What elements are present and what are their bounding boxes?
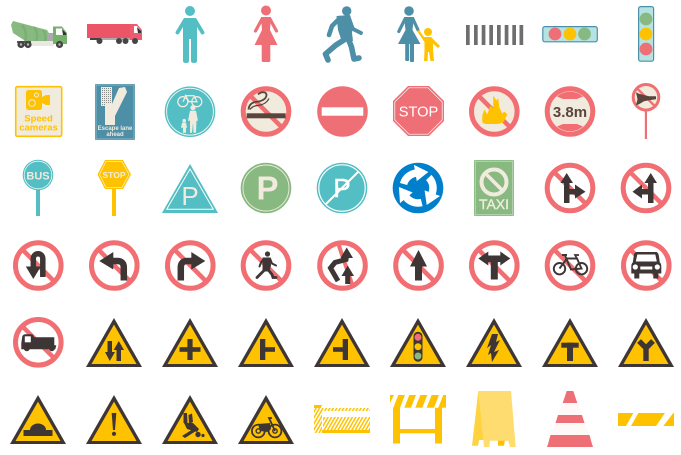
sign: T-junction warning	[542, 318, 598, 367]
icon: horizontal traffic light	[543, 27, 597, 42]
sign: no parking	[317, 163, 367, 213]
icon: woman	[254, 6, 278, 62]
sign: no parking: P	[333, 173, 351, 203]
sign: no left or right turn	[472, 243, 517, 288]
sign: no entry	[317, 86, 368, 137]
sign: shared cycle and pedestrian route	[165, 86, 215, 137]
icon: adult with child	[398, 6, 440, 62]
icon: man	[178, 6, 202, 63]
sign: no horn on pole	[633, 84, 659, 139]
sign: side road left warning	[314, 318, 370, 367]
icon: vertical traffic light	[639, 7, 654, 61]
icon: cement mixer truck	[11, 21, 67, 48]
sign: height limit 3.8m: 3.8m	[553, 104, 587, 121]
sign: bus stop on pole	[23, 160, 53, 216]
sign: no straight ahead	[396, 243, 441, 288]
sign: speed bump warning	[10, 395, 66, 444]
sign: green parking	[241, 163, 291, 213]
barrier: striped road barrier	[390, 395, 446, 444]
sign: height limit 3.8m	[547, 89, 593, 134]
sign: no taxi	[474, 160, 514, 216]
sign: bus stop on pole: BUS	[26, 170, 50, 182]
icon: red lorry	[87, 24, 142, 44]
icon: traffic cone	[547, 391, 593, 447]
sign: falling rocks warning	[162, 395, 218, 444]
sign: crossroads warning	[162, 318, 218, 367]
sign: Y-junction warning	[618, 318, 674, 367]
sign: side road right warning	[238, 318, 294, 367]
sign: speed cameras: Speed	[24, 114, 53, 124]
icon: A-frame warning board	[472, 391, 516, 447]
sign: no right turn	[168, 243, 213, 288]
sign: green parking: P	[256, 170, 279, 206]
sign: no taxi: TAXI	[479, 196, 509, 212]
sign: motorcycle warning	[238, 395, 294, 444]
sign: traffic signal warning	[390, 318, 446, 367]
sign: escape lane ahead: Escape lane	[98, 126, 133, 132]
icon: walking person	[326, 6, 361, 60]
sign: no trucks	[16, 320, 61, 365]
sign: no pedestrians	[243, 243, 289, 288]
sign: yellow stop on pole: STOP	[102, 170, 126, 180]
sign: no overtaking	[320, 243, 365, 288]
sign: two-way traffic warning	[86, 318, 142, 367]
sign: no straight or right turn	[547, 165, 593, 211]
barrier: hatched road barricade	[314, 405, 370, 433]
sign: general danger warning	[86, 395, 142, 444]
sign: no straight or left turn	[623, 165, 669, 211]
sign: electricity warning	[466, 318, 522, 367]
sign: speed cameras: cameras	[19, 122, 58, 134]
sign: no smoking	[243, 89, 289, 134]
sign: roundabout	[392, 163, 445, 213]
icon: zebra crossing	[466, 25, 523, 45]
sign: triangular parking	[162, 164, 218, 213]
sign: no U-turn	[16, 243, 61, 288]
sign: stop octagon: STOP	[399, 104, 438, 120]
sign: no motor vehicles	[624, 243, 669, 288]
sign: stop octagon	[393, 86, 444, 136]
sign: triangular parking: P	[181, 181, 199, 211]
icon: striped barrier bar	[618, 413, 674, 426]
sign: no open flames	[472, 89, 517, 134]
sign: escape lane ahead: ahead	[106, 132, 124, 138]
sign: no left turn	[92, 243, 137, 288]
sign: no cycling	[547, 243, 593, 288]
sign: escape lane ahead	[95, 84, 135, 140]
sign: speed cameras	[16, 87, 62, 136]
sign: yellow stop on pole	[98, 160, 131, 216]
